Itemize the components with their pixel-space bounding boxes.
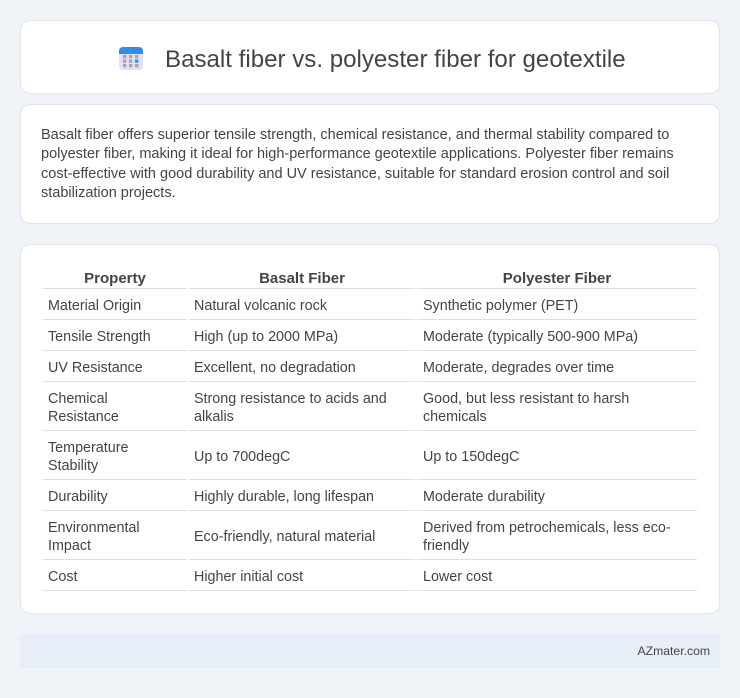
panel: summary card (20, 104, 720, 224)
row: chemical resistance: Good, but less resistant to harsh (423, 391, 629, 407)
row: UV resistance: UV Resistance (48, 360, 143, 376)
row: environmental impact: Environmental (48, 520, 140, 536)
row: material origin: Material Origin (48, 298, 141, 314)
row: temperature stability: Temperature (48, 440, 128, 456)
summary text: polyester fiber, making it ideal for high-performance geotextile applications. Polyester fiber remains (41, 146, 674, 162)
table header: Basalt Fiber (259, 270, 345, 287)
summary text: Basalt fiber offers superior tensile strength, chemical resistance, and thermal stability compared to (41, 127, 669, 143)
row: tensile strength (48, 329, 638, 345)
summary text (41, 127, 674, 201)
panel: comparison table card (20, 244, 720, 614)
row: UV resistance (48, 360, 614, 376)
row: temperature stability: Up to 150degC (423, 449, 519, 465)
row: UV resistance: Moderate, degrades over time (423, 360, 614, 376)
summary text: stabilization projects. (41, 185, 176, 201)
summary text: cost-effective with good durability and UV resistance, suitable for standard erosion control and soil (41, 166, 669, 182)
table header (84, 270, 611, 287)
row: temperature stability: Up to 700degC (194, 449, 290, 465)
title: Basalt fiber vs. polyester fiber for geotextile (165, 46, 626, 73)
row: environmental impact: Impact (48, 538, 91, 554)
row: chemical resistance: chemicals (423, 409, 487, 425)
row: material origin (48, 298, 578, 314)
row: environmental impact: Derived from petrochemicals, less eco- (423, 520, 671, 536)
panel: title card (20, 20, 720, 94)
row: cost: Higher initial cost (194, 569, 303, 585)
row: environmental impact: Eco-friendly, natural material (194, 529, 375, 545)
row: durability: Durability (48, 489, 108, 505)
row: material origin: Synthetic polymer (PET) (423, 298, 578, 314)
row: durability: Highly durable, long lifespan (194, 489, 374, 505)
row: chemical resistance: Resistance (48, 409, 119, 425)
row: durability: Moderate durability (423, 489, 545, 505)
row: cost (48, 569, 492, 585)
row: temperature stability: Stability (48, 458, 98, 474)
table header: Property (84, 270, 146, 287)
comparison table (43, 270, 697, 591)
footer credit: AZmater.com (638, 644, 710, 658)
row: chemical resistance (48, 391, 629, 425)
row: durability (48, 489, 545, 505)
row: chemical resistance: alkalis (194, 409, 234, 425)
footer bar (20, 634, 720, 668)
row: cost: Lower cost (423, 569, 492, 585)
row: chemical resistance: Chemical (48, 391, 108, 407)
row: cost: Cost (48, 569, 77, 585)
row: material origin: Natural volcanic rock (194, 298, 327, 314)
row: environmental impact: friendly (423, 538, 469, 554)
table header: Polyester Fiber (503, 270, 611, 287)
row: environmental impact (48, 520, 671, 554)
row: UV resistance: Excellent, no degradation (194, 360, 356, 376)
row: temperature stability (48, 440, 519, 474)
row: chemical resistance: Strong resistance to acids and (194, 391, 387, 407)
row: tensile strength: Tensile Strength (48, 329, 151, 345)
row: tensile strength: Moderate (typically 500-900 MPa) (423, 329, 638, 345)
row: tensile strength: High (up to 2000 MPa) (194, 329, 338, 345)
icon: calendar (119, 47, 143, 70)
